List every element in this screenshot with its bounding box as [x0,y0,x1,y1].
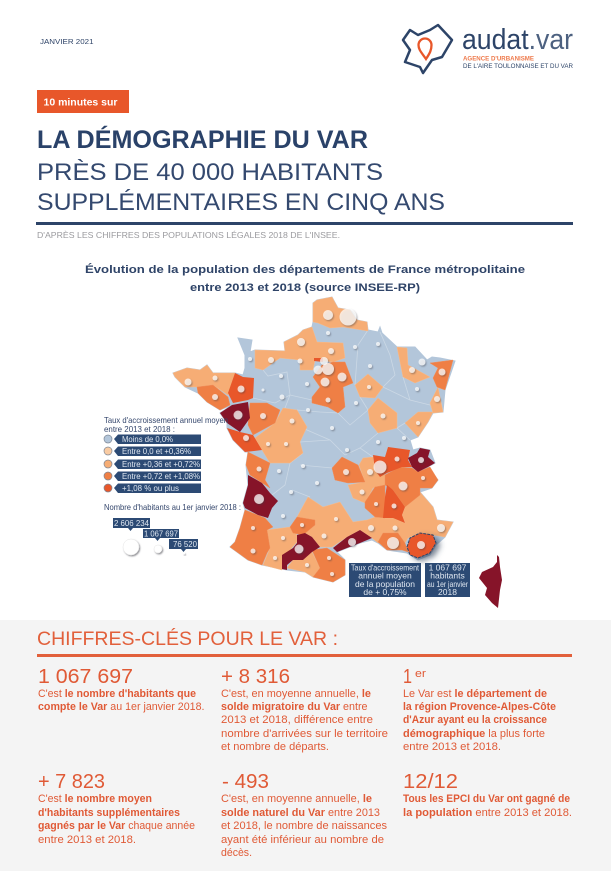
legend item: 0.36 to 0.72: Entre +0,36 et +0,72% [122,459,200,469]
dark red departments: fastest growth [220,402,435,570]
figure: +7 823: d'habitants supplémentaires [38,807,180,819]
legend item: 0.72 to 1.08: Entre +0,72 et +1,08% [122,471,200,481]
callout: Var population: habitants [430,570,465,580]
panel rule [37,654,572,657]
legend item: below 0: Moins de 0,0% [122,434,173,444]
figure: +8 316: + 8 316 [221,666,290,688]
size legend heading: Nombre d'habitants au 1er janvier 2018 : [104,502,241,512]
Corsica [479,555,502,608]
figure: 1er: entre 2013 et 2018. [403,741,501,753]
figure: 1 067 697: 1 067 697 [38,666,133,688]
figure: -493: ayant été inférieur au nombre de [221,834,384,846]
blue department borders [253,330,430,497]
callout: Var growth rate: de la population [355,579,415,589]
figure: +8 316: 2013 et 2018, différence entre [221,714,373,726]
legend heading [104,415,228,434]
logo: audat.var: DE L'AIRE TOULONNAISE ET DU VAR [463,63,573,70]
map heading: Évolution de la population des départements de France métropolitaine [85,263,525,276]
figure: 1er: démographique la plus forte [403,728,545,740]
map heading [85,263,525,294]
badge: 10 minutes sur: 10 minutes sur [44,96,118,108]
callout: Var growth rate [349,562,421,597]
figure: 12/12 [403,771,572,819]
figure: +8 316: et nombre de départs. [221,741,329,753]
title [37,125,445,216]
figure: -493 [221,771,388,859]
legend: growth rate [104,415,228,493]
figure: 1er: d'Azur ayant eu la croissance [403,714,547,726]
figure: +7 823: + 7 823 [38,771,105,793]
figure: +7 823 [38,771,195,846]
deep orange departments: +1.08% or more [227,358,412,523]
light orange departments: +0.36 to +0.72% [173,297,453,577]
figure: +7 823: C'est le nombre moyen [38,793,152,805]
size item: 1 067 697: 1 067 697 [144,528,178,538]
figure: -493: C'est, en moyenne annuelle, le [221,793,372,805]
callout: Var population: au 1er janvier [427,579,468,589]
date: JANVIER 2021 [40,37,94,46]
title rule [36,222,573,225]
figure: 1er: Le Var est le département de [403,688,547,700]
legend item: 1.08 or more: +1,08 % ou plus [122,483,179,493]
legend item: 0 to 0.36: Entre 0,0 et +0,36% [122,446,191,456]
figure: 1er: er [415,668,426,680]
figure: 12/12: Tous les EPCI du Var ont gagné de [403,793,570,805]
figure: +7 823: gagnés par le Var chaque année [38,820,195,832]
callout: Var population: 2018 [438,587,457,597]
orange departments: +0.72 to +1.08% [197,360,453,582]
figure: -493: - 493 [222,771,269,793]
panel: key figures [0,620,611,871]
figure: +7 823: entre 2013 et 2018. [38,834,136,846]
figure: +8 316 [221,666,388,753]
title: LA DÉMOGRAPHIE DU VAR [37,125,368,154]
figure: 1er: 1 [403,666,412,688]
legend heading: entre 2013 et 2018 : [104,424,175,434]
icon: territory outline with location pin [403,25,452,73]
figure: -493: solde naturel du Var entre 2013 [221,807,380,819]
callout: Var population: 1 067 697 [429,562,467,572]
figure: 1 067 697 [38,666,204,713]
figure: +8 316: C'est, en moyenne annuelle, le [221,688,371,700]
title: SUPPLÉMENTAIRES EN CINQ ANS [37,189,445,216]
logo tagline: AGENCE D'URBANISME [463,56,535,62]
figure: +8 316: solde migratoire du Var entre [221,701,368,713]
subtitle: D'APRÈS LES CHIFFRES DES POPULATIONS LÉGALES 2018 DE L'INSEE. [37,230,340,240]
panel heading: CHIFFRES-CLÉS POUR LE VAR : [37,627,338,650]
logo: audat.var [403,24,573,73]
base: departments below 0% [173,297,455,582]
Var department highlight [407,533,436,558]
figure: 1 067 697: C'est le nombre d'habitants que [38,688,196,700]
figure: 12/12: la population entre 2013 et 2018. [403,807,572,819]
figure: 1er [403,666,556,753]
map of France [173,297,502,608]
figure: -493: décès. [221,847,252,859]
figure: +8 316: nombre d'arrivées sur le territoire [221,728,388,740]
figure: 12/12: 12/12 [403,771,458,793]
population circles [184,308,446,576]
callout: Var growth rate: de + 0,75% [363,587,407,597]
callout: Var growth rate: annuel moyen [358,570,412,580]
legend heading: Taux d'accroissement annuel moyen [104,415,228,425]
map heading: entre 2013 et 2018 (source INSEE-RP) [190,282,420,294]
callout: Var growth rate: Taux d'accroissement [351,562,420,572]
callout: Var population [425,562,470,597]
figure: 1 067 697: compte le Var au 1er janvier 2018. [38,701,204,713]
figure: 1er: la région Provence-Alpes-Côte [403,701,556,713]
legend: population size [104,502,241,555]
size item: 76 520: 76 520 [173,539,197,549]
wordmark: audat.var [462,24,573,56]
title: PRÈS DE 40 000 HABITANTS [37,159,383,186]
badge: 10 minutes sur [37,90,129,113]
size item: 2 606 234: 2 606 234 [114,518,149,528]
figure: -493: et 2018, le nombre de naissances [221,820,388,832]
